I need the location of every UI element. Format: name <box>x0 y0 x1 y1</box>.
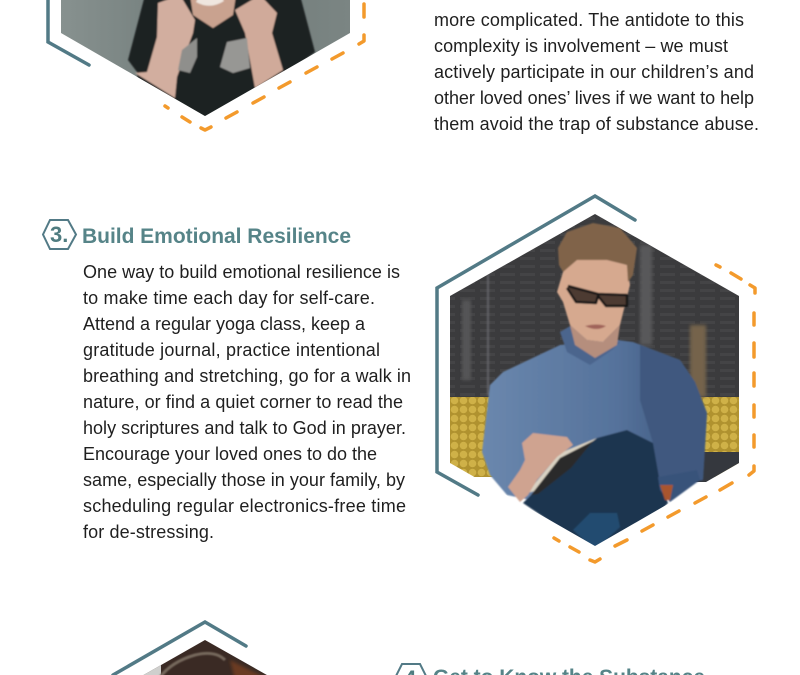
text block: closing of section 2: them avoid the trap of substance abuse. <box>434 114 759 134</box>
icon: number 4 hexagon <box>395 664 427 675</box>
text block: closing of section 2 <box>434 10 759 134</box>
text block: section 3 body <box>83 262 411 542</box>
icon: number 3 hexagon <box>43 220 76 249</box>
photo: smiling young man with headphones <box>61 0 350 120</box>
text block: closing of section 2: complexity is involvement – we must <box>434 36 728 56</box>
outline: orange dashed frame, photo 1 <box>165 4 364 130</box>
text block: section 3 body: holy scriptures and talk to God in prayer. <box>83 418 406 438</box>
text block: section 3 body: scheduling regular electronics-free time <box>83 496 406 516</box>
heading: Build Emotional Resilience: Build Emotional Resilience <box>82 225 351 248</box>
text block: section 3 body: same, especially those in your family, by <box>83 470 405 490</box>
outline: orange dashed frame, photo 2 <box>554 265 755 562</box>
outline: teal frame, photo 2 <box>437 196 635 495</box>
text block: section 3 body: nature, or find a quiet corner to read the <box>83 392 403 412</box>
text block: section 3 body: Encourage your loved ones to do the <box>83 444 377 464</box>
text block: closing of section 2: actively participate in our children’s and <box>434 62 754 82</box>
text block: section 3 body: gratitude journal, practice intentional <box>83 340 380 360</box>
text block: section 3 body: Attend a regular yoga class, keep a <box>83 314 366 334</box>
outline: teal frame, photo 1 <box>48 0 89 65</box>
text block: closing of section 2: more complicated. The antidote to this <box>434 10 744 30</box>
text block: section 3 body: to make time each day for self-care. <box>83 288 375 308</box>
text block: section 3 body: breathing and stretching, go for a walk in <box>83 366 411 386</box>
text block: closing of section 2: other loved ones’ lives if we want to help <box>434 88 754 108</box>
icon: number 3 hexagon: 3. <box>50 222 68 247</box>
photo: young man with glasses writing in a notebook <box>450 214 740 552</box>
outline: teal frame, photo 3 <box>113 622 246 675</box>
photo: top of a man's head with brown hair <box>144 640 267 675</box>
text block: section 3 body: One way to build emotional resilience is <box>83 262 400 282</box>
text block: section 3 body: for de-stressing. <box>83 522 214 542</box>
